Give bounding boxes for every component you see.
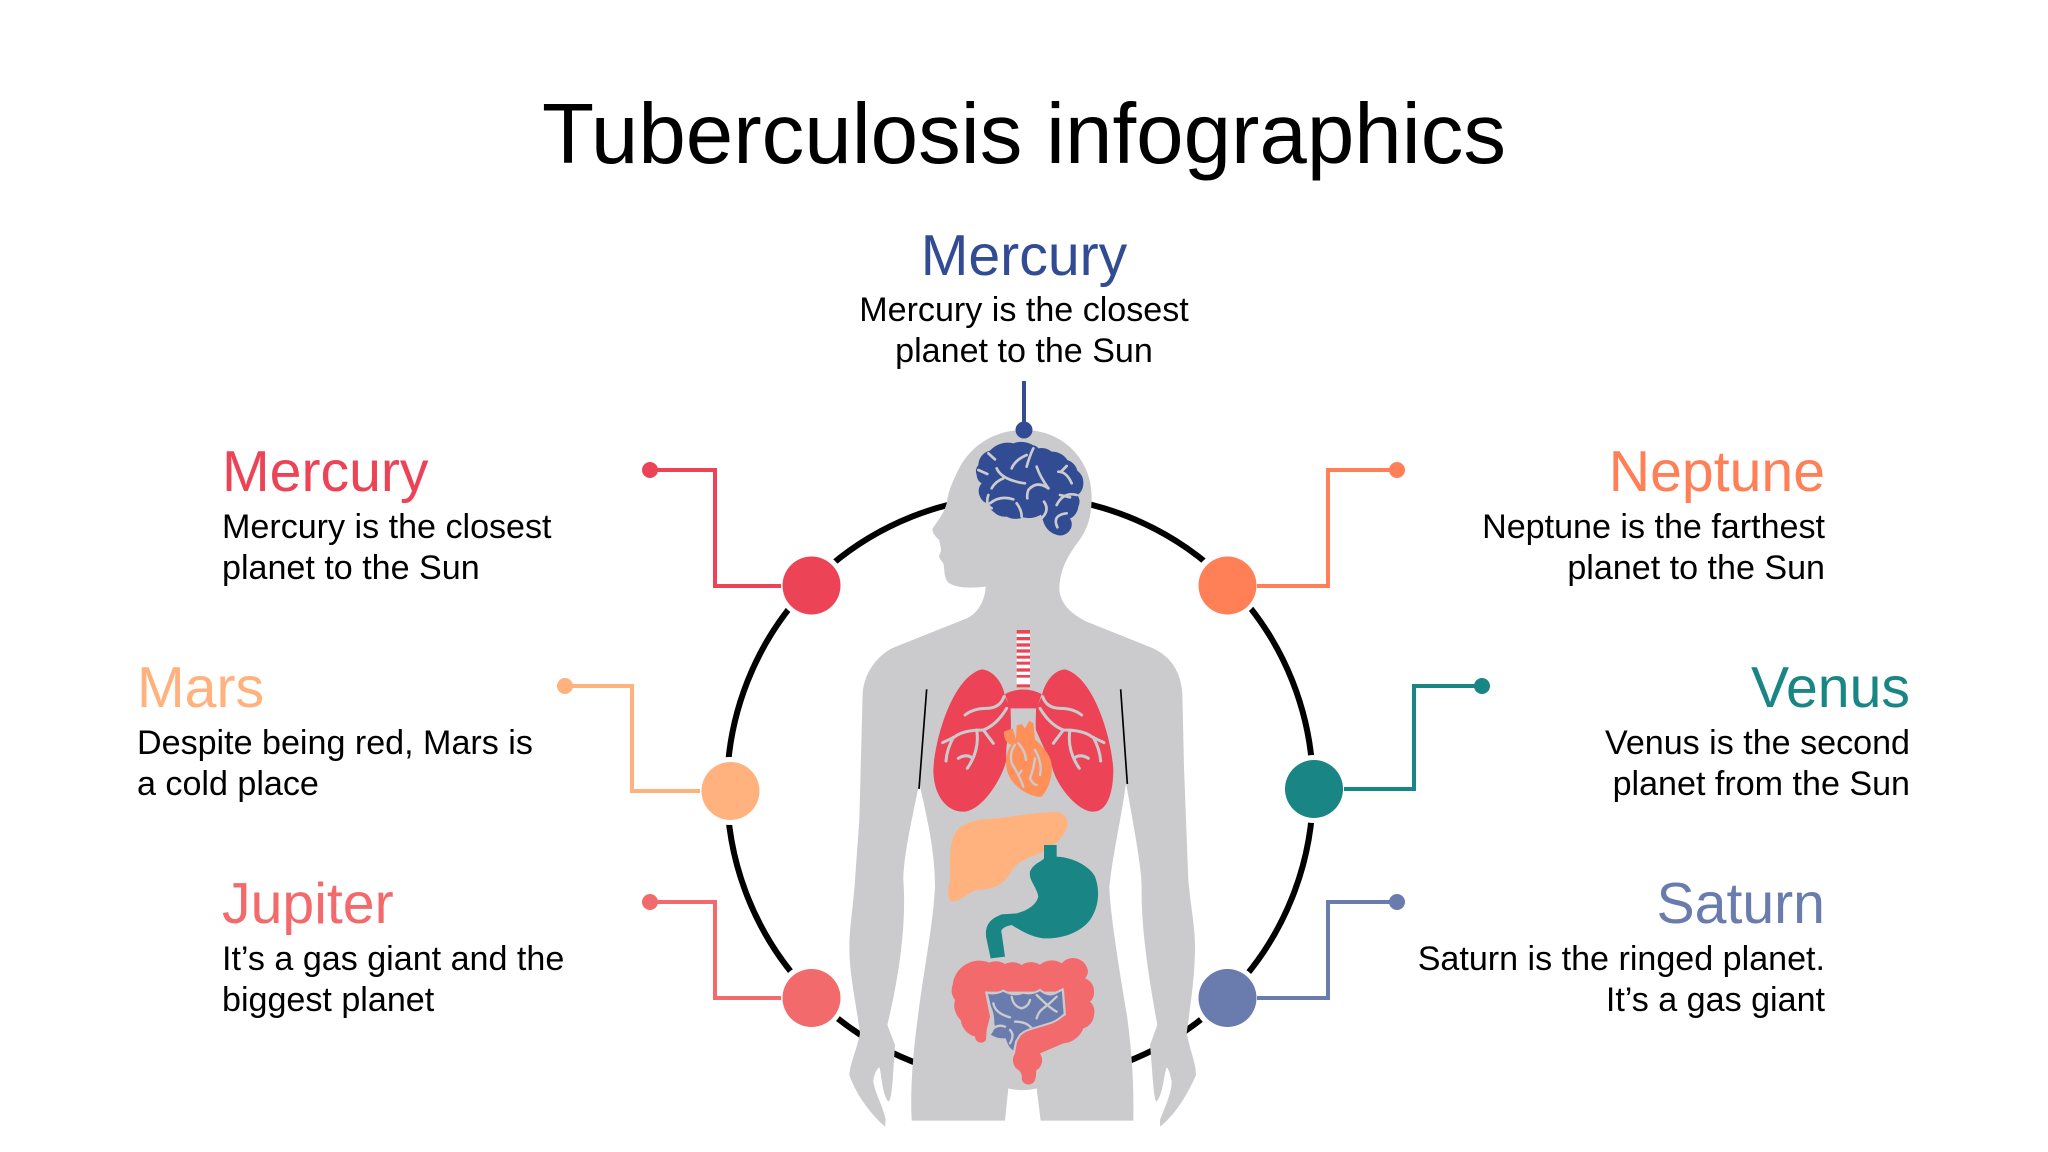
arm lines	[919, 689, 1127, 789]
connector: left Mercury	[644, 464, 781, 586]
liver	[948, 812, 1068, 902]
lungs	[933, 630, 1113, 812]
heart	[1004, 721, 1052, 797]
node: left Mercury	[782, 556, 840, 614]
text block: top Mercury	[859, 224, 1189, 370]
connector: top Mercury	[1016, 381, 1032, 438]
text block: Mars: Despite being red, Mars is	[137, 724, 533, 762]
text block: Venus: planet from the Sun	[1613, 765, 1910, 803]
text block: Jupiter: It’s a gas giant and the	[222, 940, 564, 978]
text block: top Mercury: planet to the Sun	[895, 332, 1153, 370]
text block: Saturn: Saturn	[1656, 872, 1825, 936]
text block: Neptune: Neptune	[1609, 440, 1825, 504]
ring	[696, 496, 1348, 1082]
text block: Saturn	[1418, 872, 1826, 1019]
text block: Mars: Mars	[137, 656, 264, 720]
connector: Jupiter	[644, 896, 781, 998]
trachea	[1017, 630, 1030, 687]
text block: left Mercury	[222, 440, 552, 587]
text block: Venus: Venus is the second	[1605, 724, 1910, 762]
node: Neptune	[1198, 556, 1256, 614]
node: Venus	[1285, 760, 1343, 818]
text block: Saturn: It’s a gas giant	[1606, 981, 1826, 1019]
node: Saturn	[1198, 969, 1256, 1027]
node: Jupiter	[782, 969, 840, 1027]
text block: Jupiter	[222, 872, 564, 1019]
text block: Jupiter: biggest planet	[222, 981, 435, 1019]
connector: Venus	[1344, 680, 1488, 789]
node: Mars	[702, 762, 760, 820]
brain	[976, 442, 1083, 535]
text block: Neptune: planet to the Sun	[1567, 549, 1825, 587]
text block: Mars: a cold place	[137, 765, 319, 803]
connector: Saturn	[1257, 896, 1403, 998]
large intestine	[952, 958, 1094, 1085]
text block: left Mercury: planet to the Sun	[222, 549, 480, 587]
small intestine	[987, 989, 1065, 1052]
text block: Mars	[137, 656, 533, 803]
text block: left Mercury: Mercury	[222, 440, 429, 504]
text block: Saturn: Saturn is the ringed planet.	[1418, 940, 1825, 978]
title: Tuberculosis infographics	[542, 87, 1506, 182]
connector: Neptune	[1257, 464, 1403, 586]
text block: top Mercury: Mercury is the closest	[859, 291, 1189, 329]
text block: Neptune	[1482, 440, 1826, 587]
text block: Venus: Venus	[1751, 656, 1910, 720]
text block: top Mercury: Mercury	[921, 224, 1128, 288]
stomach	[986, 845, 1098, 958]
text block: left Mercury: Mercury is the closest	[222, 508, 552, 546]
connector: Mars	[559, 680, 700, 791]
body silhouette	[849, 430, 1196, 1127]
text block: Neptune: Neptune is the farthest	[1482, 508, 1826, 546]
human body illustration	[849, 430, 1196, 1127]
text block: Jupiter: Jupiter	[222, 872, 394, 936]
text block: Venus	[1605, 656, 1910, 803]
